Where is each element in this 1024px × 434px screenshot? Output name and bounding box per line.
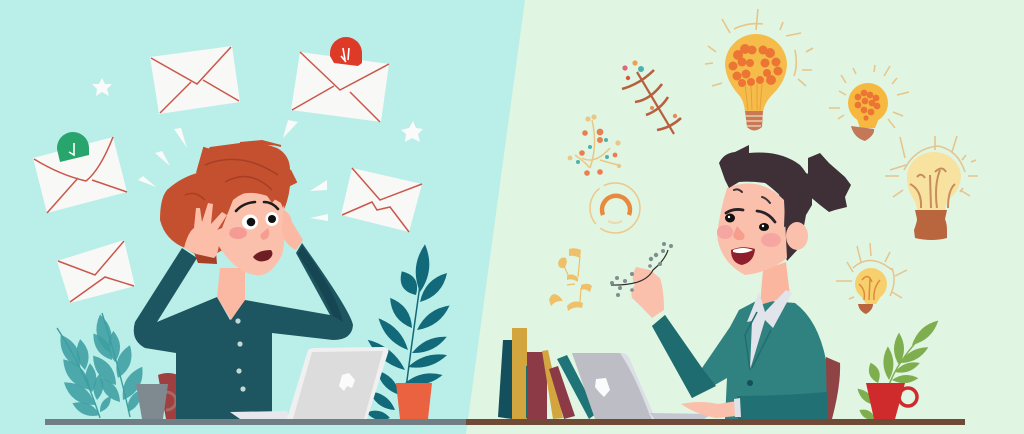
icon: star right (401, 121, 423, 142)
face (717, 184, 787, 275)
hair fringe (719, 145, 812, 227)
background: stressed teal left panel (0, 0, 525, 434)
light bulb: large brain (705, 9, 813, 130)
shirt cuff (734, 398, 741, 417)
left hand (184, 203, 230, 258)
desk: brown right side (466, 419, 965, 425)
character: inspired person (610, 145, 851, 419)
envelope: left with green badge (33, 132, 127, 213)
icon: star left (92, 78, 112, 96)
light bulb: small pale (836, 243, 907, 314)
stress spark marks (138, 120, 328, 221)
laptop: silver open (572, 353, 712, 419)
cheeks (717, 225, 781, 247)
eyes (242, 212, 278, 230)
chair back (158, 373, 178, 419)
neck (760, 262, 790, 305)
shirt (134, 243, 353, 419)
shirt buttons (235, 318, 246, 392)
twig (610, 242, 673, 297)
left panel: email overload (33, 37, 453, 422)
lapel lines (745, 312, 771, 370)
sleeve shadow (298, 246, 343, 322)
hair back (778, 165, 812, 261)
envelope: right (341, 168, 422, 232)
plant pot: orange (396, 383, 432, 419)
envelope: top centre (150, 46, 240, 114)
mouth (253, 250, 272, 261)
hair fringe (209, 160, 287, 232)
light bulb: pale with pot base (885, 136, 978, 240)
jacket (652, 300, 827, 419)
right hand (282, 210, 303, 250)
eyebrows (726, 209, 775, 222)
jacket button (747, 380, 753, 386)
doodle: circular gauge (590, 183, 640, 233)
mug: red (866, 383, 917, 419)
hair bun (808, 153, 851, 212)
mug: grey (136, 384, 176, 419)
nose (260, 228, 269, 240)
cheek (229, 227, 247, 239)
shirt collar (747, 290, 792, 370)
hair spikes (163, 141, 296, 205)
doodle: brown sprig (622, 60, 681, 134)
ear (786, 222, 808, 250)
eyebrows (236, 202, 278, 211)
character: stressed person (134, 141, 353, 419)
envelope: lower left (57, 240, 135, 303)
raised hand (631, 267, 664, 318)
laptop: silver (230, 347, 388, 419)
hair back (160, 143, 290, 260)
sleeve shade (652, 315, 716, 398)
plant: dark teal fern (364, 244, 453, 422)
chair back (820, 357, 840, 419)
face (215, 193, 285, 275)
mouth (731, 247, 755, 265)
plant: green sprig (855, 317, 942, 422)
neck (217, 268, 245, 320)
hair tuft near ear (193, 250, 217, 264)
doodle: floral branch (568, 114, 621, 176)
eyes (725, 214, 769, 231)
envelope: top right with red badge (291, 37, 389, 122)
light bulb: small brain (829, 65, 909, 141)
right panel: creative ideas (498, 9, 978, 422)
desk: grey left side (45, 419, 466, 425)
typing hand (681, 401, 737, 418)
plant: light teal bush (55, 313, 148, 420)
doodle: gold music notes (549, 248, 592, 311)
nose (733, 226, 745, 240)
books stack (498, 328, 597, 419)
